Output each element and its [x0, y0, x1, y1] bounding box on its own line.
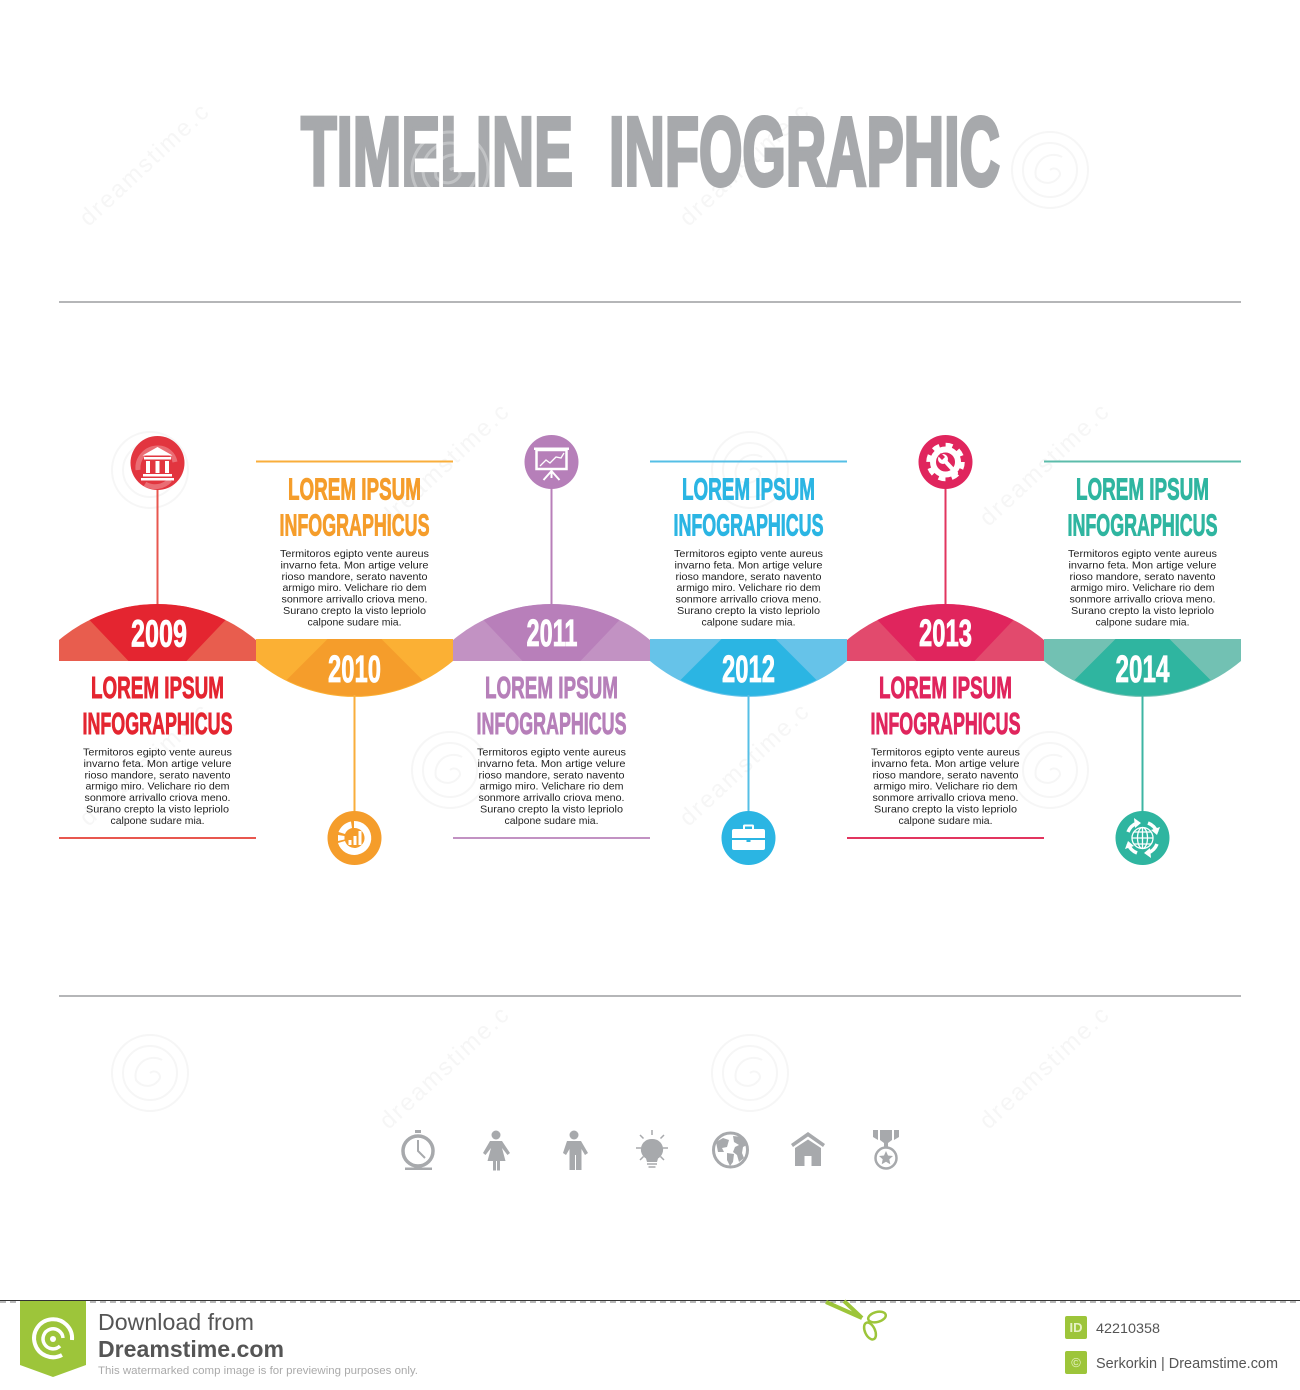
text block 2012: rioso mandore, serato navento — [676, 572, 822, 583]
footer download text — [98, 1309, 418, 1377]
icon: house — [791, 1132, 825, 1166]
rule 2012 — [650, 460, 847, 462]
band 2009: 2009 — [131, 614, 187, 656]
text block 2010: sonmore arrivallo criova meno. — [282, 595, 428, 606]
band 2014: 2014 — [1116, 649, 1170, 691]
rule 2009 — [59, 837, 256, 839]
band 2010 — [256, 639, 453, 697]
footer green badge — [20, 1301, 86, 1377]
text block 2009: Surano crepto la visto lepriolo — [86, 804, 229, 816]
band 2012 — [650, 639, 847, 697]
text block 2010: Termitoros egipto vente aureus — [280, 549, 429, 560]
icon: bank — [130, 436, 184, 490]
watermark layer on white — [112, 132, 1088, 1111]
icon: stopwatch — [403, 1130, 433, 1170]
step 2013 — [847, 435, 1044, 839]
text block 2012: Termitoros egipto vente aureus — [674, 549, 823, 560]
watermark overlay on title — [412, 132, 488, 208]
text block 2013: rioso mandore, serato navento — [872, 770, 1019, 781]
text block 2011: calpone sudare mia. — [504, 816, 598, 827]
bottom divider — [59, 995, 1241, 997]
text block 2013: calpone sudare mia. — [898, 816, 992, 827]
text block 2014 — [1068, 472, 1218, 628]
text block 2014: Termitoros egipto vente aureus — [1068, 549, 1217, 560]
icon: medal — [873, 1130, 899, 1168]
text block 2009: Termitoros egipto vente aureus — [83, 748, 232, 758]
title — [301, 97, 1000, 206]
watermark text on white: dreamstime.c — [374, 397, 516, 532]
watermark text on white: dreamstime.c — [74, 697, 216, 832]
text block 2011: rioso mandore, serato navento — [478, 770, 625, 781]
watermark text on white: dreamstime.c — [74, 97, 216, 232]
text block 2012 — [674, 472, 824, 628]
text block 2009: armigo miro. Velichare rio dem — [86, 782, 230, 793]
band 2014 — [1044, 639, 1241, 697]
text block 2010 — [280, 472, 430, 628]
footer dashed cut line — [0, 1300, 1300, 1302]
step 2010 — [256, 460, 453, 865]
text block 2010: Surano crepto la visto lepriolo — [283, 606, 426, 617]
footer ID — [1065, 1316, 1160, 1339]
band 2012: 2012 — [722, 649, 775, 691]
text block 2013: sonmore arrivallo criova meno. — [872, 793, 1018, 804]
connector 2014 — [1142, 695, 1144, 813]
text block 2014: armigo miro. Velichare rio dem — [1070, 583, 1214, 594]
text block 2014: invarno feta. Mon artige velure — [1068, 560, 1217, 571]
icon: man — [563, 1130, 588, 1170]
text block 2012: sonmore arrivallo criova meno. — [676, 595, 822, 606]
icon: globe with arrows — [1116, 811, 1170, 865]
text block 2012: armigo miro. Velichare rio dem — [676, 583, 820, 594]
rule 2011 — [453, 837, 650, 839]
connector 2010 — [354, 695, 356, 813]
text block 2012: calpone sudare mia. — [702, 617, 796, 628]
text block 2009: rioso mandore, serato navento — [84, 770, 231, 781]
rule 2013 — [847, 837, 1044, 839]
watermark text on white — [74, 97, 1116, 1135]
band 2013 — [847, 604, 1044, 661]
text block 2010: armigo miro. Velichare rio dem — [282, 583, 426, 594]
text block 2013 — [870, 670, 1020, 827]
text block 2012: LOREM IPSUM — [682, 472, 815, 506]
text block 2011: INFOGRAPHICUS — [476, 706, 626, 741]
connector 2009 — [156, 488, 158, 606]
text block 2010: rioso mandore, serato navento — [282, 572, 428, 583]
text block 2010: calpone sudare mia. — [308, 617, 402, 628]
icon: woman — [483, 1130, 510, 1170]
text block 2011: Termitoros egipto vente aureus — [477, 748, 626, 758]
text block 2009: calpone sudare mia. — [110, 816, 204, 827]
footer download text: Dreamstime.com — [98, 1336, 284, 1362]
text block 2012: invarno feta. Mon artige velure — [674, 560, 823, 571]
text block 2009: LOREM IPSUM — [91, 670, 224, 705]
step 2011 — [453, 435, 650, 839]
text block 2013: LOREM IPSUM — [879, 670, 1012, 705]
text block 2009: INFOGRAPHICUS — [82, 706, 232, 741]
text block 2014: Surano crepto la visto lepriolo — [1071, 606, 1214, 617]
text block 2012: Surano crepto la visto lepriolo — [677, 606, 820, 617]
text block 2010: INFOGRAPHICUS — [280, 508, 430, 542]
icon: light bulb — [636, 1130, 668, 1167]
text block 2014: rioso mandore, serato navento — [1070, 572, 1216, 583]
connector 2013 — [944, 488, 946, 606]
rule 2010 — [256, 460, 453, 462]
text block 2011: armigo miro. Velichare rio dem — [480, 782, 624, 793]
connector 2011 — [550, 488, 552, 606]
text block 2011: invarno feta. Mon artige velure — [478, 759, 626, 770]
text block 2014: sonmore arrivallo criova meno. — [1070, 595, 1216, 606]
watermark text on white: dreamstime.c — [674, 697, 816, 832]
band 2010: 2010 — [328, 649, 381, 691]
band 2013: 2013 — [919, 613, 972, 655]
text block 2013: invarno feta. Mon artige velure — [872, 759, 1020, 770]
step 2009 — [59, 436, 256, 839]
footer download text: This watermarked comp image is for previewing purposes only. — [98, 1365, 418, 1377]
icon: presentation board — [524, 435, 578, 489]
watermark text on white: dreamstime.c — [374, 1000, 516, 1135]
band 2011: 2011 — [526, 613, 578, 655]
watermark text on white: dreamstime.c — [974, 1000, 1116, 1135]
icon: donut chart — [328, 811, 382, 865]
text block 2014: calpone sudare mia. — [1096, 617, 1190, 628]
step 2012 — [650, 460, 847, 865]
icon: gear with wrench — [918, 435, 972, 489]
band 2009 — [59, 604, 256, 661]
watermark text on white: dreamstime.c — [674, 97, 816, 232]
title: INFOGRAPHIC — [609, 97, 1000, 206]
text block 2009: sonmore arrivallo criova meno. — [84, 793, 230, 804]
footer ID: ID — [1070, 1320, 1082, 1335]
text block 2009: invarno feta. Mon artige velure — [84, 759, 232, 770]
text block 2011: Surano crepto la visto lepriolo — [480, 804, 623, 816]
icon row — [403, 1130, 899, 1170]
text block 2013: armigo miro. Velichare rio dem — [874, 782, 1018, 793]
icon: world globe — [714, 1133, 748, 1167]
text block 2014: LOREM IPSUM — [1076, 472, 1209, 506]
footer credit: © — [1071, 1355, 1081, 1370]
footer credit — [1065, 1351, 1278, 1374]
icon: briefcase — [722, 811, 776, 865]
connector 2012 — [748, 695, 750, 813]
watermark text on white: dreamstime.c — [974, 397, 1116, 532]
footer download text: Download from — [98, 1309, 254, 1335]
footer credit: Serkorkin | Dreamstime.com — [1096, 1356, 1278, 1372]
rule 2014 — [1044, 460, 1241, 462]
text block 2010: invarno feta. Mon artige velure — [280, 560, 429, 571]
text block 2011: LOREM IPSUM — [485, 670, 618, 705]
footer ID: 42210358 — [1096, 1320, 1160, 1336]
text block 2011: sonmore arrivallo criova meno. — [478, 793, 624, 804]
text block 2013: Surano crepto la visto lepriolo — [874, 804, 1017, 816]
text block 2013: Termitoros egipto vente aureus — [871, 748, 1020, 758]
text block 2010: LOREM IPSUM — [288, 472, 421, 506]
text block 2011 — [476, 670, 626, 827]
title: TIMELINE — [301, 97, 573, 206]
top divider — [59, 301, 1241, 303]
step 2014 — [1044, 460, 1241, 865]
text block 2013: INFOGRAPHICUS — [870, 706, 1020, 741]
band 2011 — [453, 604, 650, 661]
text block 2012: INFOGRAPHICUS — [674, 508, 824, 542]
icon: scissors — [826, 1301, 887, 1341]
text block 2009 — [82, 670, 232, 827]
